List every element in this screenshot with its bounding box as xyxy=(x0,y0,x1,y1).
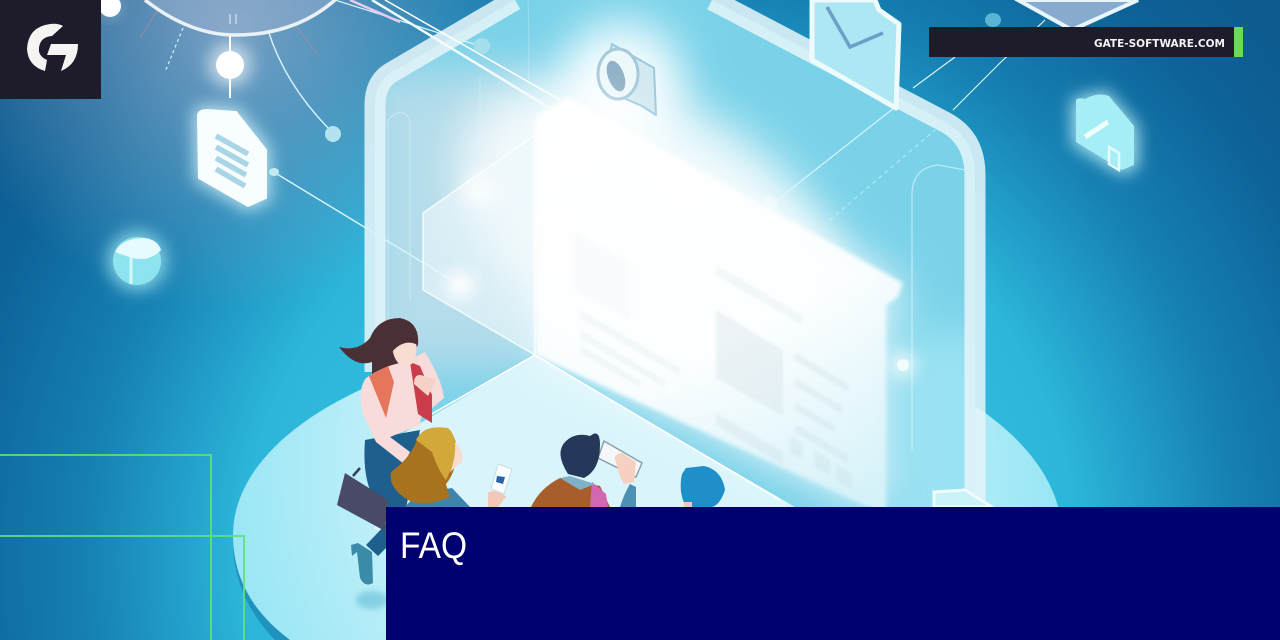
person: woman standing xyxy=(337,318,444,609)
URL text: GATE-SOFTWARE.COM xyxy=(1094,38,1225,50)
glow node right of screen xyxy=(890,352,916,378)
left pane xyxy=(423,135,535,355)
person: blue hair man xyxy=(681,466,725,507)
icon: clock panel xyxy=(812,0,899,108)
icon: G logo xyxy=(27,24,78,71)
small box at bottom right xyxy=(934,490,992,507)
glow node top left xyxy=(99,0,121,17)
dial at top xyxy=(145,0,335,35)
face xyxy=(392,340,416,366)
icon: cylinder badge xyxy=(107,231,167,291)
icon: camera lens xyxy=(598,44,656,115)
glow node under dial xyxy=(208,43,252,87)
sweater xyxy=(361,352,444,464)
legs xyxy=(364,430,420,556)
icon: top right tile xyxy=(1018,0,1138,30)
connector lines xyxy=(140,0,1045,285)
shoe shadow xyxy=(356,591,388,609)
URL bar xyxy=(929,27,1243,57)
screen panel xyxy=(423,97,903,515)
green outline box 1 xyxy=(0,455,211,640)
icon: cyan cube xyxy=(1076,95,1134,170)
platform disc xyxy=(233,325,1062,640)
glass frame xyxy=(365,0,990,560)
icon: document xyxy=(198,110,266,206)
small nodes xyxy=(269,13,1001,210)
green outline box 2 xyxy=(0,536,244,640)
logo block xyxy=(0,0,101,99)
briefcase xyxy=(337,473,388,531)
title panel xyxy=(386,507,1280,640)
shoe xyxy=(351,543,373,585)
hair back xyxy=(339,318,418,375)
person: blonde woman xyxy=(391,427,512,507)
hand xyxy=(414,375,436,396)
person: man with tablet xyxy=(531,433,642,507)
floor inside frame xyxy=(375,355,800,530)
screen content blocks xyxy=(575,232,852,490)
heading: FAQ: FAQ xyxy=(400,525,467,566)
vest straps xyxy=(369,366,394,418)
